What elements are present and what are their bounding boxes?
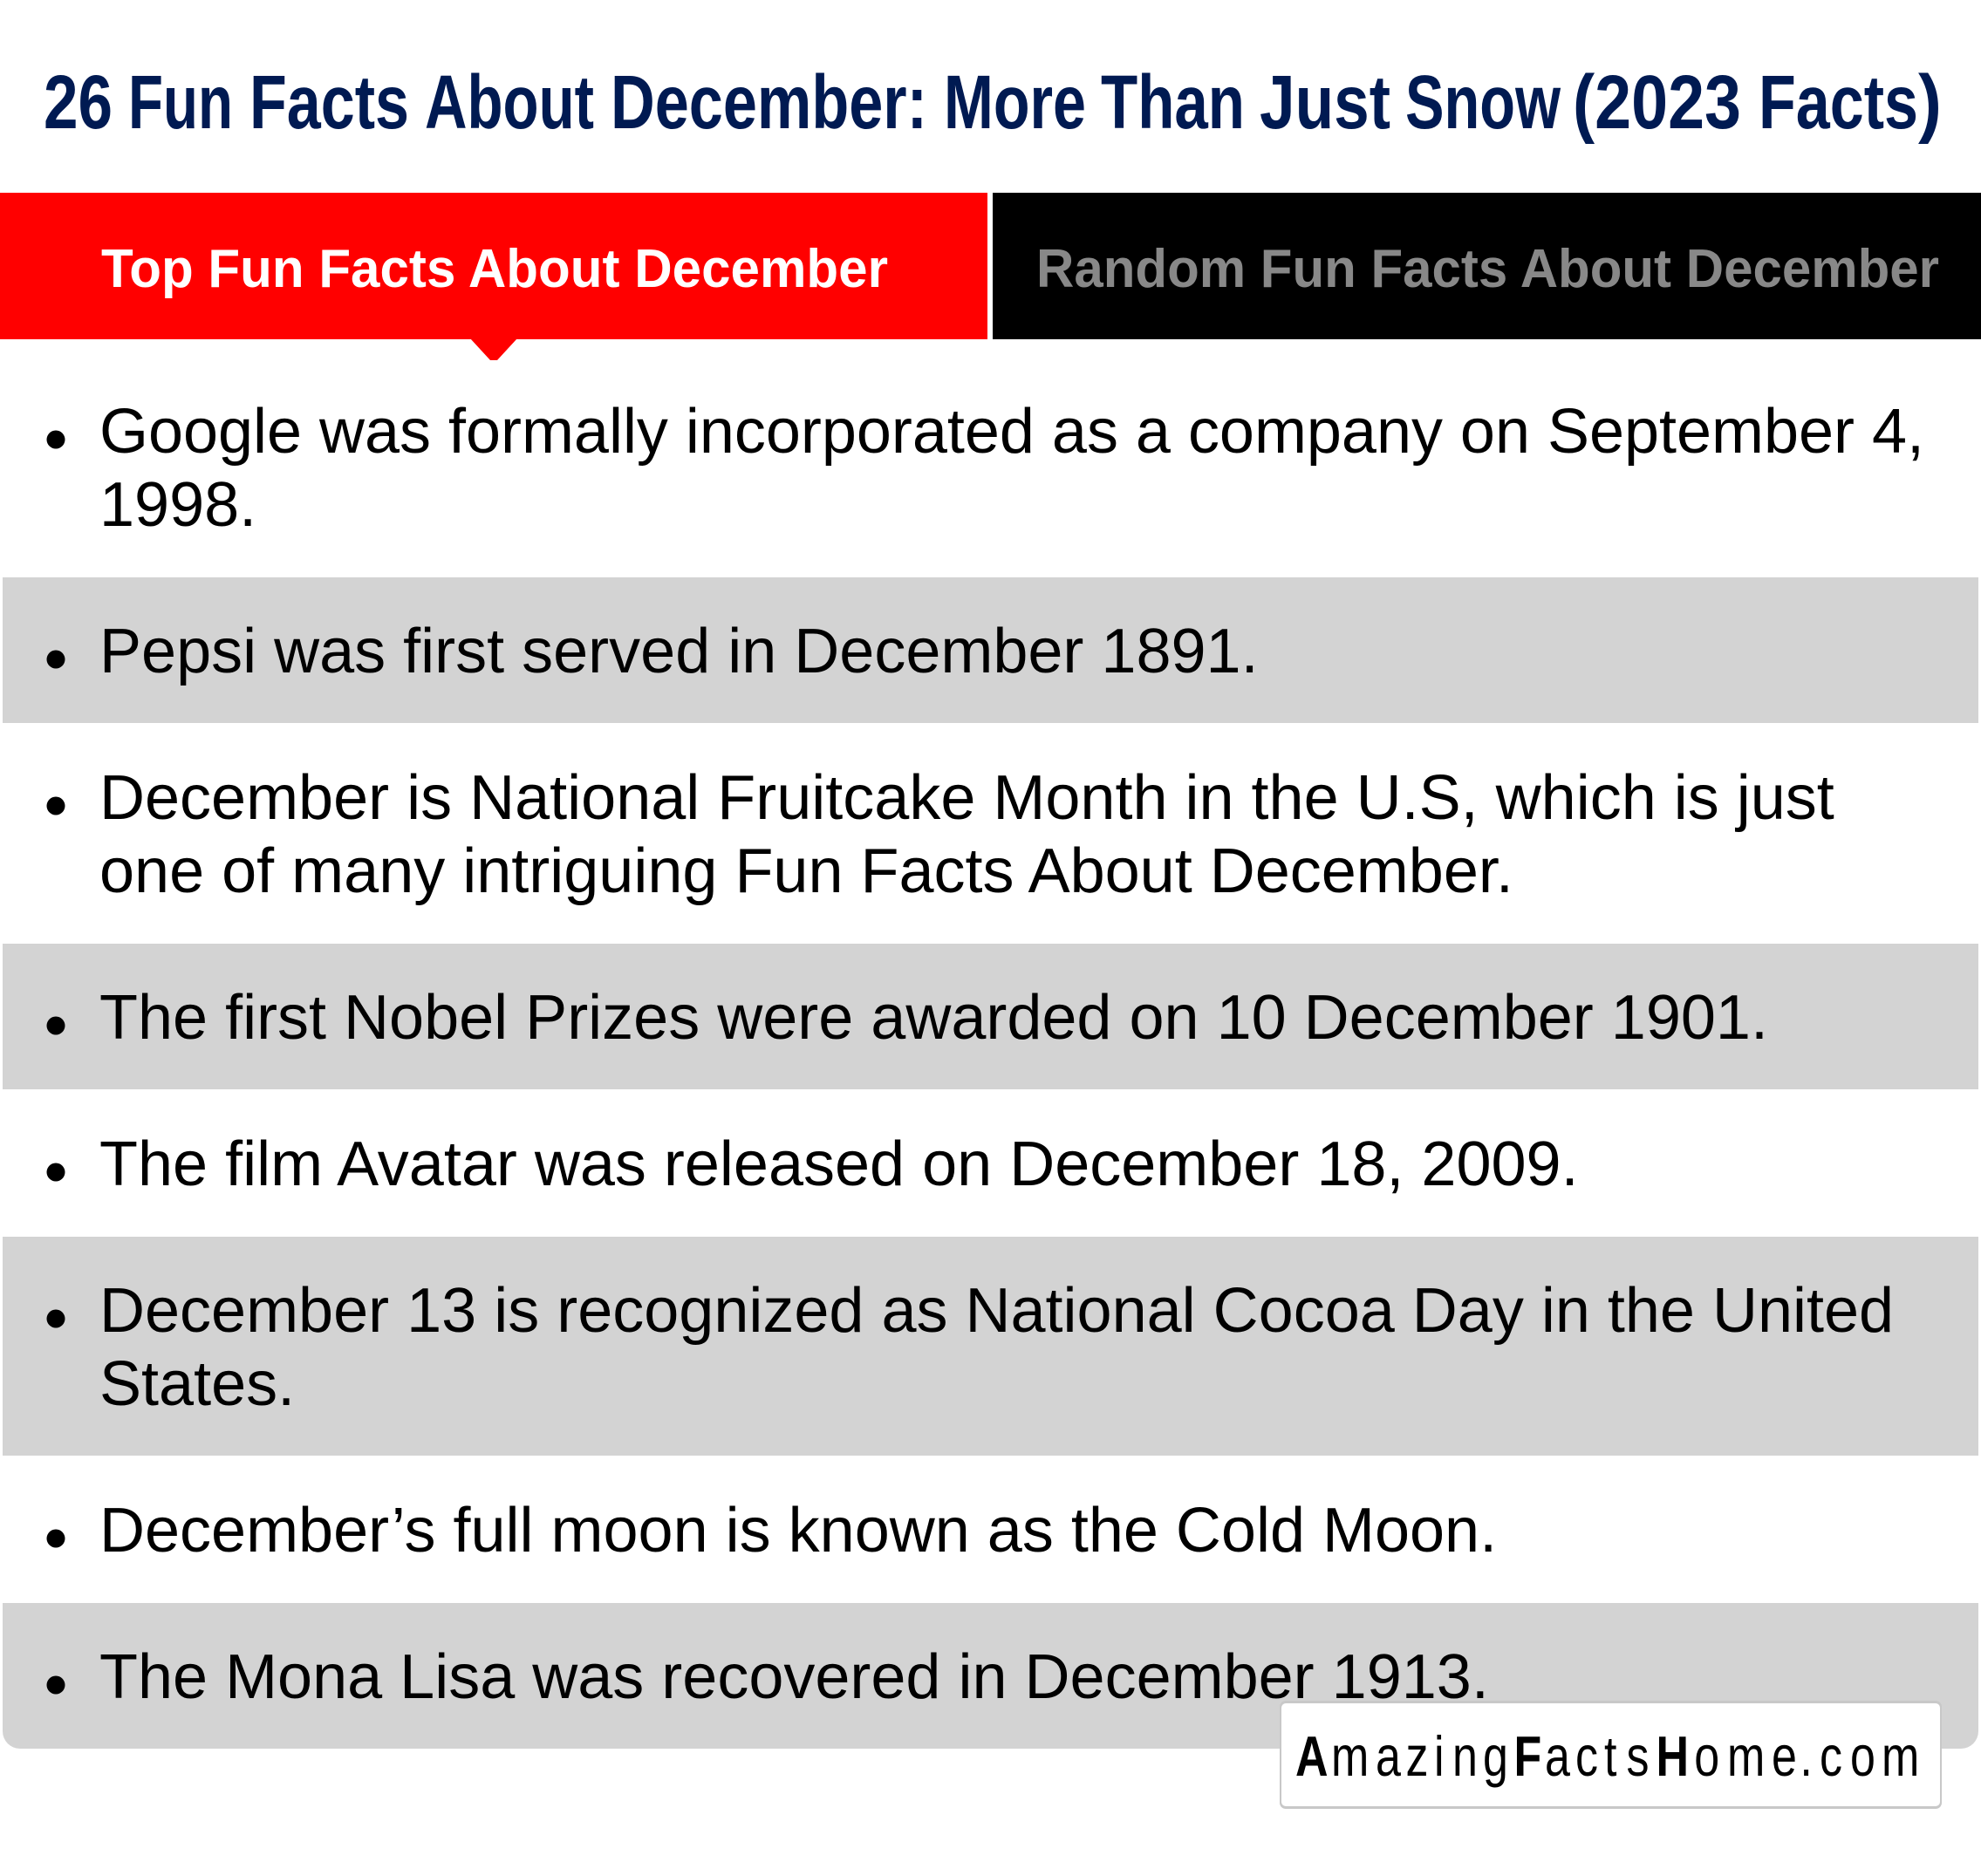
title: Fun [128,60,233,145]
watermark badge: A [1295,1726,1329,1788]
watermark badge: acts [1545,1726,1649,1788]
title: ) [1918,60,1942,145]
watermark badge: mazing [1331,1726,1508,1788]
title: 26 [44,60,113,145]
tab: random fun facts: Random Fun Facts About December [1036,238,1939,299]
fact 1: 1998. [99,470,256,540]
fact 7: December’s full moon is known as the Cold Moon. [99,1496,1497,1566]
fact 1 [47,397,1924,540]
watermark badge [1280,1701,1942,1809]
title: Just [1260,60,1390,145]
fact 3: one of many intriguing Fun Facts About December. [99,836,1513,906]
watermark badge: ome.com [1694,1726,1919,1788]
title: (2023 [1573,60,1741,145]
fact 6 row: December 13 is recognized as National Cocoa Day in the United [99,1276,1894,1346]
tab: top fun facts (active): Top Fun Facts About December [101,238,888,299]
title [44,60,1942,145]
fact 3: December is National Fruitcake Month in the U.S, which is just [99,763,1834,833]
title: Snow [1405,60,1561,145]
title: Facts [1759,60,1918,145]
title: Facts [249,60,409,145]
watermark badge: H [1656,1726,1689,1788]
fact 6 row [3,1237,1978,1456]
fact list [3,397,1978,1749]
fact 1: Google was formally incorporated as a company on September 4, [99,397,1924,467]
title: More [944,60,1086,145]
fact 5: The film Avatar was released on December 18, 2009. [99,1129,1579,1199]
fact 3 [47,763,1834,906]
title: Than [1101,60,1245,145]
fact 2 row: Pepsi was first served in December 1891. [99,617,1259,686]
title: December: [611,60,927,145]
fact 2 row [3,577,1978,723]
tab: random fun facts [993,193,1981,339]
title: About [425,60,594,145]
watermark badge: F [1514,1726,1541,1788]
tab: top fun facts (active) [0,193,987,360]
fact 8 row: The Mona Lisa was recovered in December 1913. [99,1642,1489,1712]
fact 4 row: The first Nobel Prizes were awarded on 10 December 1901. [99,983,1768,1053]
fact 4 row [3,944,1978,1089]
fact 8 row [3,1603,1978,1749]
fact 6 row: States. [99,1349,295,1419]
